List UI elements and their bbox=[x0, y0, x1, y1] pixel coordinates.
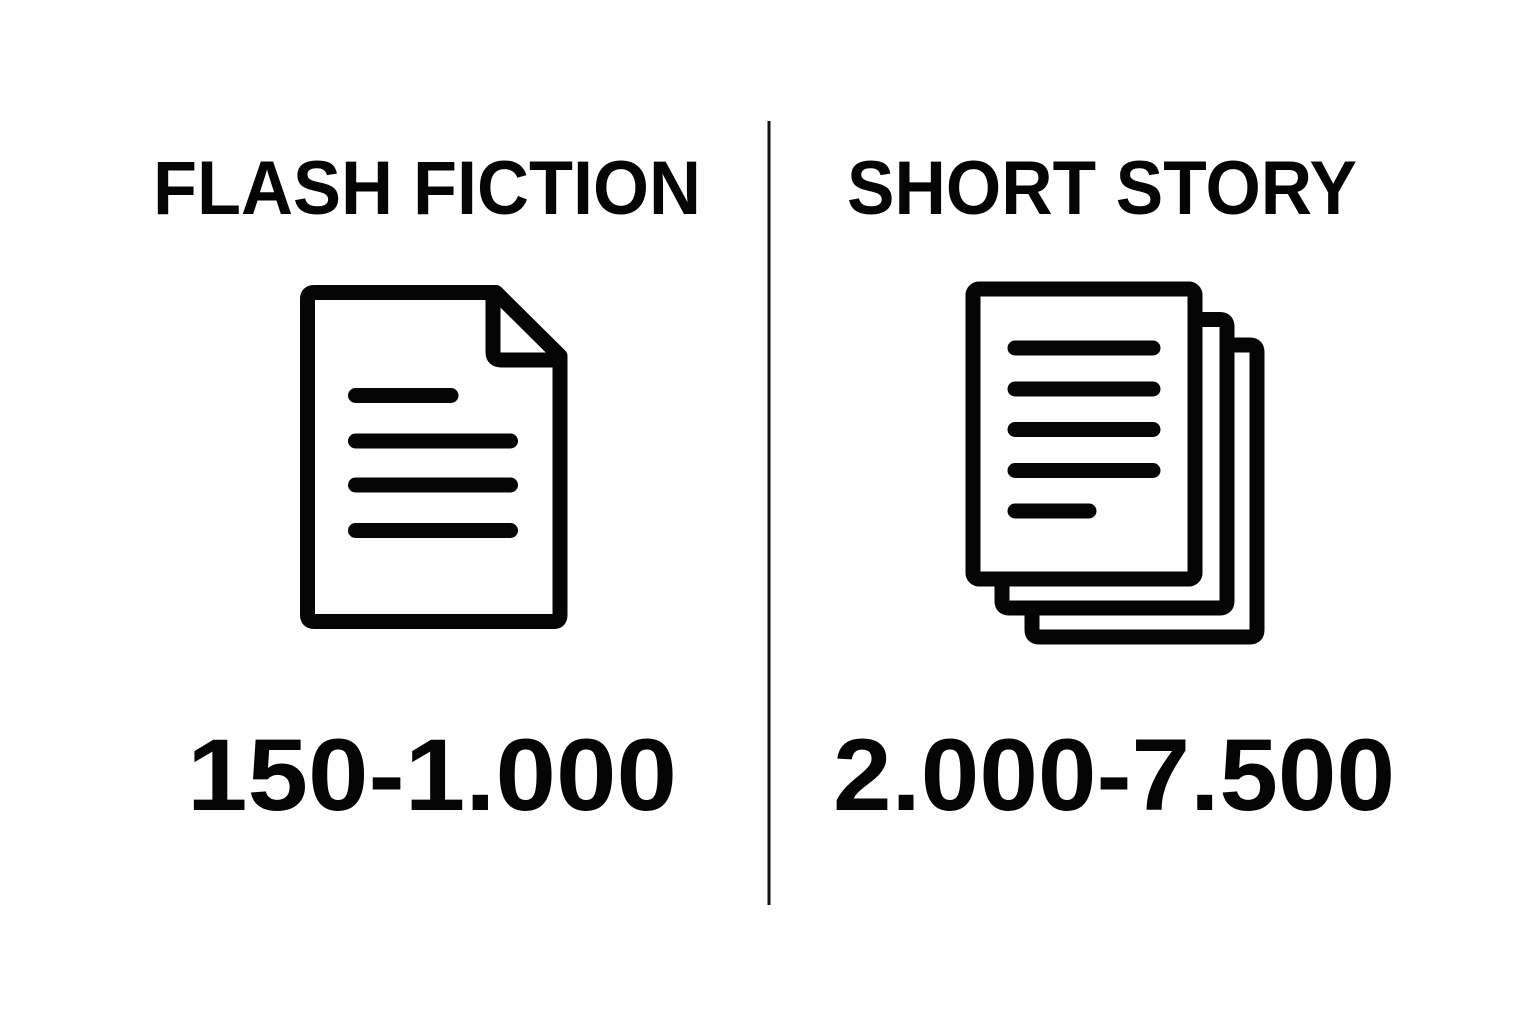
icon: stack of documents bbox=[973, 289, 1257, 637]
number: short story word count: 2.000-7.500 bbox=[833, 718, 1395, 832]
icon: single document bbox=[308, 292, 560, 622]
heading: flash fiction: FLASH FICTION bbox=[153, 146, 701, 231]
number: flash fiction word count: 150-1.000 bbox=[187, 718, 677, 832]
heading: short story: SHORT STORY bbox=[847, 146, 1357, 231]
